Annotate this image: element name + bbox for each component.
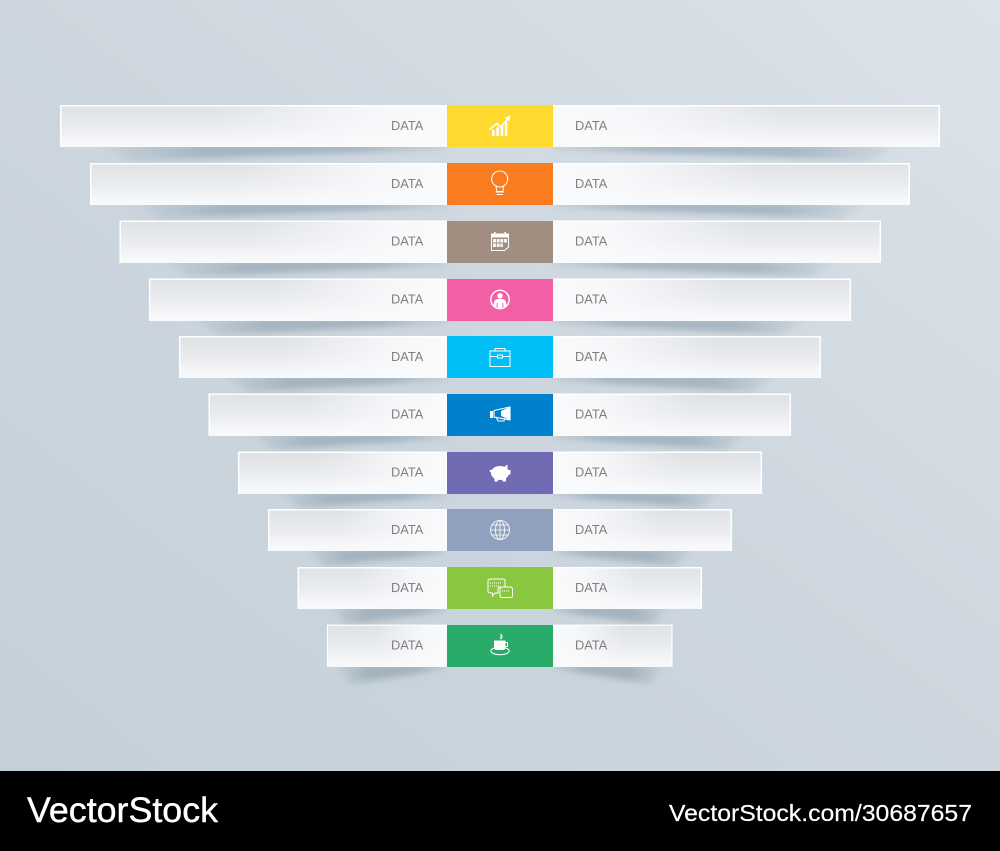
row 2: orange bulb: DATA: [391, 176, 424, 191]
row 1: yellow chart: DATA: [391, 118, 424, 133]
row 9: green chat bubbles: DATA: [575, 580, 608, 595]
row 6: blue megaphone: DATA: [575, 407, 608, 422]
row 10: dark green cup: DATA: [575, 638, 608, 653]
icon: megaphone: [490, 407, 510, 421]
row 4: pink person: DATA: [575, 292, 608, 306]
icon: calendar: [492, 232, 508, 250]
row 5: cyan briefcase: DATA: [575, 349, 608, 364]
row 5: cyan briefcase: [179, 336, 821, 378]
row 3: taupe calendar: [120, 221, 881, 263]
row 8: slate globe: [268, 509, 732, 551]
icon: chat bubbles: [488, 579, 512, 598]
row 1: yellow chart: DATA: [575, 118, 608, 133]
row 4: pink person: DATA: [391, 292, 424, 306]
row 4: pink person: [149, 279, 851, 321]
row 3: taupe calendar: DATA: [391, 234, 424, 249]
footer logo: VectorStock: [27, 791, 219, 830]
row 5: cyan briefcase: DATA: [391, 349, 424, 364]
row 7: purple piggy bank: DATA: [391, 464, 424, 480]
icon: light bulb: [492, 171, 508, 194]
row 10: dark green cup: DATA: [391, 638, 424, 653]
footer band: [0, 771, 1000, 851]
row 8: slate globe: DATA: [391, 522, 424, 537]
icon: rising chart: [489, 116, 510, 136]
row 8: slate globe: DATA: [575, 522, 608, 537]
icon: globe: [490, 520, 510, 540]
row 7: purple piggy bank: [238, 452, 762, 494]
icon: person in circle: [491, 290, 509, 309]
icon: briefcase: [490, 348, 510, 366]
row 2: orange bulb: [90, 163, 910, 205]
row 7: purple piggy bank: DATA: [575, 464, 608, 480]
icon: coffee cup: [491, 634, 509, 655]
icon: piggy bank: [490, 464, 510, 482]
row 9: green chat bubbles: [298, 567, 702, 609]
row 9: green chat bubbles: DATA: [391, 580, 424, 595]
row 3: taupe calendar: DATA: [575, 234, 608, 249]
row 6: blue megaphone: [209, 394, 791, 436]
row 10: dark green cup: [327, 625, 672, 667]
row 1: yellow chart: [60, 105, 940, 147]
bar shadows: [100, 144, 900, 684]
footer url: VectorStock.com/30687657: [669, 800, 972, 826]
row 6: blue megaphone: DATA: [391, 407, 424, 422]
row 2: orange bulb: DATA: [575, 176, 608, 191]
background light facet: [790, 0, 1000, 230]
